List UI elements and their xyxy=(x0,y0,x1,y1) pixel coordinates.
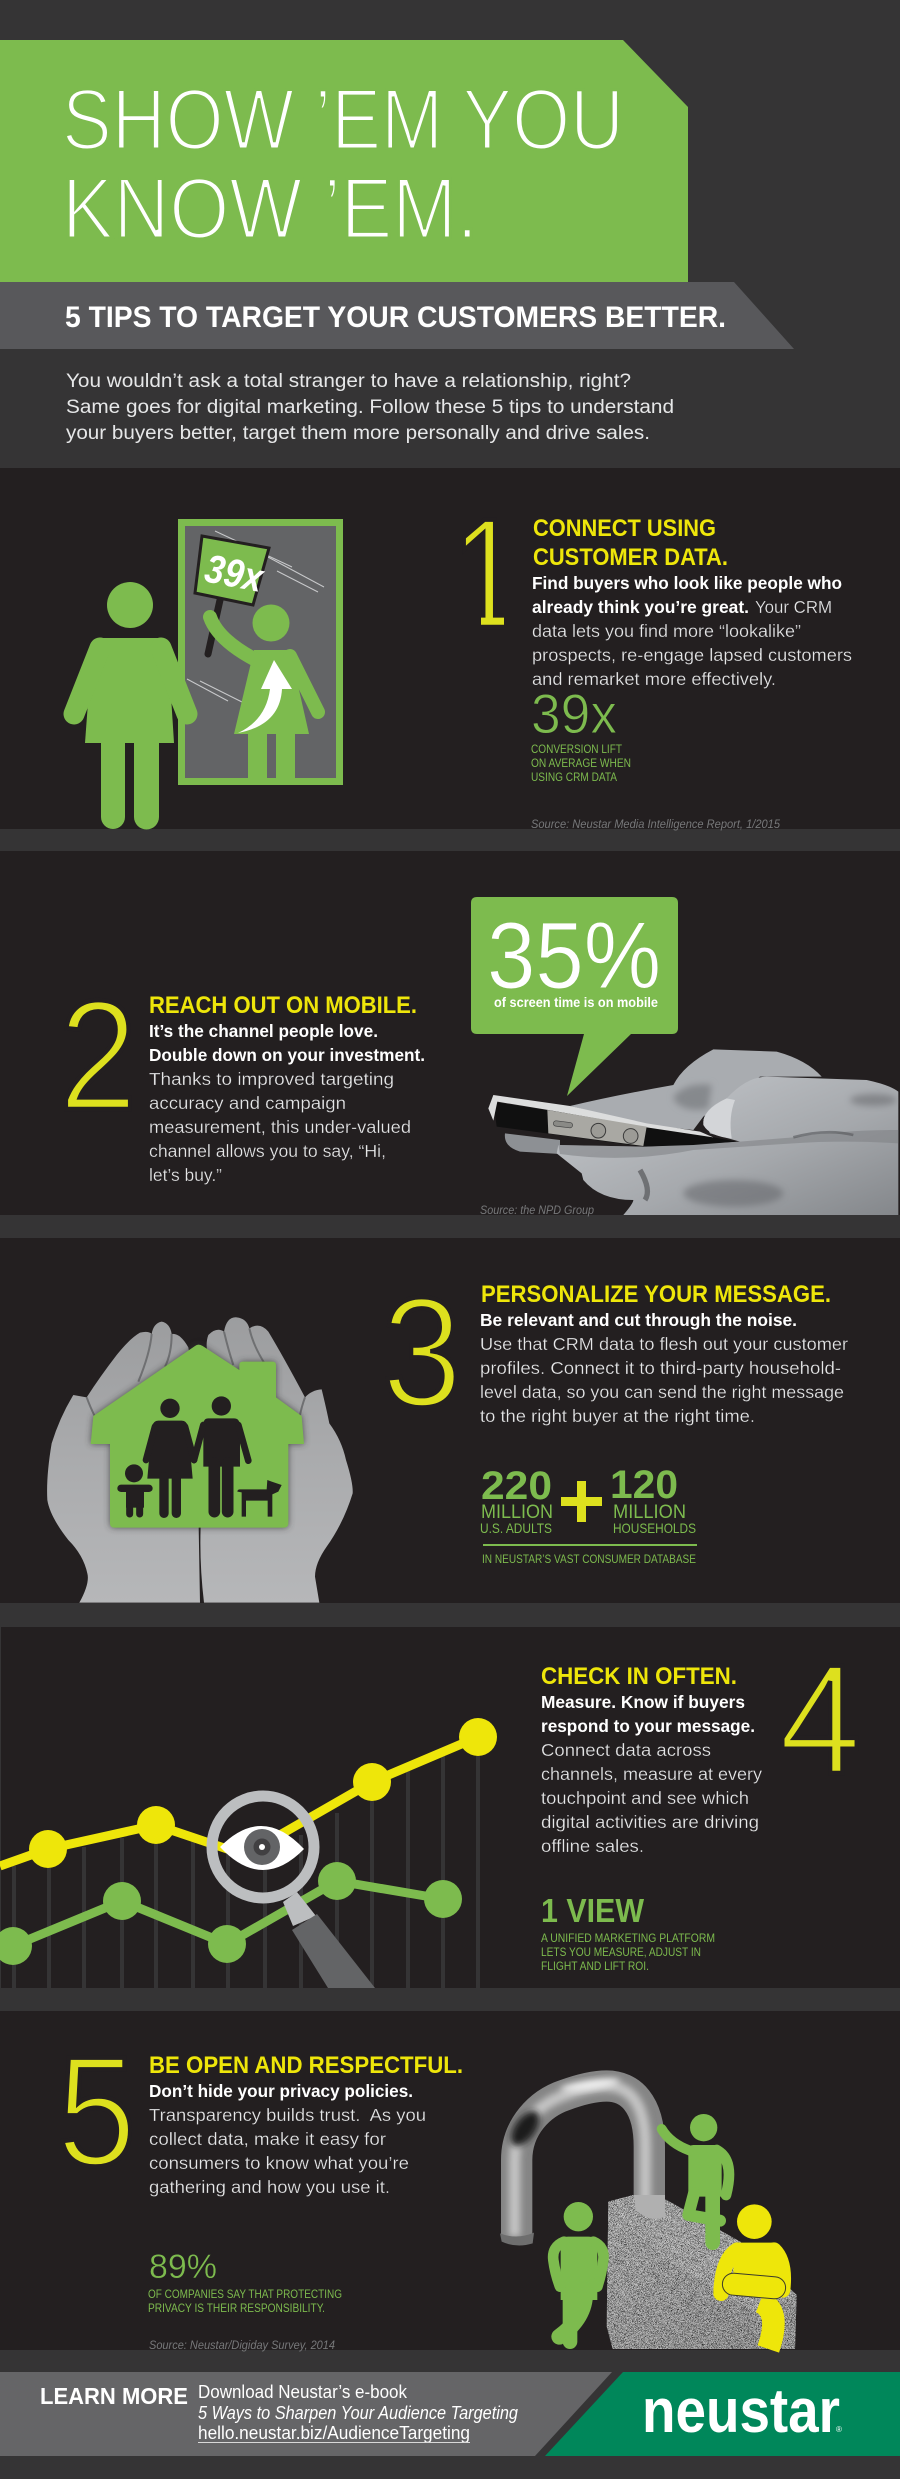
stat: 220 million + 120 million: MILLION xyxy=(613,1502,686,1523)
title: KNOW ’EM. xyxy=(62,161,478,257)
figure: yellow person sitting xyxy=(721,2204,787,2349)
body text: measurement, this under-valued xyxy=(149,1117,411,1137)
panel: tip 4 xyxy=(0,1627,900,1988)
body text xyxy=(541,1692,762,1856)
body text: touchpoint and see which xyxy=(541,1788,749,1808)
body text: Find buyers who look like people who xyxy=(532,573,842,593)
stat: 220 million + 120 million: IN NEUSTAR’S VAST CONSUMER DATABASE xyxy=(482,1552,696,1566)
stat: 39x: ON AVERAGE WHEN xyxy=(531,756,631,770)
body text: Double down on your investment. xyxy=(149,1045,425,1065)
body text: It’s the channel people love. xyxy=(149,1021,378,1041)
footer: neustar logo xyxy=(545,2372,900,2456)
body text: Connect data across xyxy=(541,1740,711,1760)
family xyxy=(121,1396,282,1517)
body text: accuracy and campaign xyxy=(149,1093,346,1113)
numeral 2: 2 xyxy=(59,969,137,1143)
body text: to the right buyer at the right time. xyxy=(480,1406,755,1426)
numeral 1: 1 xyxy=(452,487,522,661)
header: title banner xyxy=(0,40,688,282)
footer: learn more bar: 5 Ways to Sharpen Your Audience Targeting xyxy=(198,2403,518,2423)
body text: Thanks to improved targeting xyxy=(149,1069,394,1089)
panel: tip 2 xyxy=(0,851,900,1217)
title: SHOW ’EM YOU xyxy=(62,72,624,168)
chart: line chart with magnifier xyxy=(0,1627,497,1988)
heading xyxy=(533,515,728,571)
body text xyxy=(480,1310,848,1426)
footer: neustar logo: ® xyxy=(836,2425,842,2434)
stat: 1 view: LETS YOU MEASURE, ADJUST IN xyxy=(541,1945,701,1959)
intro text: You wouldn’t ask a total stranger to have a relationship, right? xyxy=(66,371,631,392)
callout: 35% speech bubble: of screen time is on mobile xyxy=(494,994,658,1010)
body text: Don’t hide your privacy policies. xyxy=(149,2081,413,2101)
subtitle ribbon xyxy=(0,282,794,349)
body text: data lets you find more “lookalike” xyxy=(532,621,801,641)
body text: and remarket more effectively. xyxy=(532,669,776,689)
body text: collect data, make it easy for xyxy=(149,2129,386,2149)
body text: digital activities are driving xyxy=(541,1812,759,1832)
stat: 39x xyxy=(531,682,631,784)
panel: tip 1 xyxy=(0,468,900,831)
callout: 35% speech bubble xyxy=(471,897,678,1096)
intro text xyxy=(66,371,674,444)
body text: gathering and how you use it. xyxy=(149,2177,390,2197)
body text: let’s buy.” xyxy=(149,1165,222,1185)
heading: BE OPEN AND RESPECTFUL. xyxy=(149,2052,463,2079)
stat: 220 million + 120 million: 120 xyxy=(610,1463,678,1507)
house shadow xyxy=(91,1345,304,1528)
numeral 3: 3 xyxy=(382,1266,462,1440)
stat: 220 million + 120 million: 220 xyxy=(481,1464,552,1508)
stat: 39x: 39x xyxy=(531,682,617,745)
intro text: Same goes for digital marketing. Follow these 5 tips to understand xyxy=(66,397,674,418)
source note: Source: Neustar Media Intelligence Report, 1/2015 xyxy=(531,819,781,831)
body text: level data, so you can send the right message xyxy=(480,1382,844,1402)
image: hands holding phone xyxy=(488,1049,898,1215)
figure: green man walking xyxy=(553,2202,604,2342)
figure: green man climbing xyxy=(662,2114,729,2243)
panel: tip 5 xyxy=(0,2011,900,2352)
panel: tip 3 xyxy=(0,1238,900,1603)
body text: Be relevant and cut through the noise. xyxy=(480,1310,797,1330)
house xyxy=(91,1345,304,1528)
footer: learn more bar: LEARN MORE xyxy=(40,2383,188,2409)
title xyxy=(62,72,624,257)
stat: 1 view: 1 VIEW xyxy=(541,1892,645,1929)
heading: REACH OUT ON MOBILE. xyxy=(149,992,417,1019)
callout: 35% speech bubble: 35% xyxy=(487,903,661,1009)
stat: 1 view xyxy=(541,1892,715,1973)
image: padlock with figures xyxy=(500,2077,800,2350)
stat: 1 view: A UNIFIED MARKETING PLATFORM xyxy=(541,1931,715,1945)
heading: CUSTOMER DATA. xyxy=(533,544,728,571)
stat: 220 million + 120 million: HOUSEHOLDS xyxy=(613,1520,696,1536)
body text xyxy=(149,1021,425,1185)
source note: Source: Neustar/Digiday Survey, 2014 xyxy=(149,2340,335,2352)
heading: CHECK IN OFTEN. xyxy=(541,1663,737,1690)
heading: PERSONALIZE YOUR MESSAGE. xyxy=(481,1281,831,1308)
body text: Your CRM xyxy=(755,597,832,617)
body text: channels, measure at every xyxy=(541,1764,762,1784)
heading: CONNECT USING xyxy=(533,515,716,542)
stat: 220 million + 120 million: U.S. ADULTS xyxy=(480,1520,552,1536)
numeral 5: 5 xyxy=(57,2025,136,2199)
body text: prospects, re-engage lapsed customers xyxy=(532,645,852,665)
icon: woman and mirror xyxy=(74,519,343,830)
icon: magnifier with eye xyxy=(212,1796,375,1988)
stat: 39x: CONVERSION LIFT xyxy=(531,742,623,756)
footer: learn more bar: Download Neustar’s e-book xyxy=(198,2382,408,2402)
body text: channel allows you to say, “Hi, xyxy=(149,1141,386,1161)
body text: already think you’re great. xyxy=(532,597,749,617)
image: hands holding house with family xyxy=(47,1317,353,1603)
footer: learn more bar xyxy=(0,2372,612,2456)
numeral 4: 4 xyxy=(779,1633,861,1807)
stat: 89% xyxy=(148,2248,342,2315)
intro text: your buyers better, target them more personally and drive sales. xyxy=(66,423,650,444)
stat: 39x: USING CRM DATA xyxy=(531,770,617,784)
body text: profiles. Connect it to third-party household- xyxy=(480,1358,841,1378)
body text: Transparency builds trust. As you xyxy=(149,2105,426,2125)
icon: woman and mirror: 39x xyxy=(201,547,268,601)
footer: neustar logo: neustar xyxy=(642,2377,840,2446)
body text xyxy=(149,2081,426,2197)
body text: Use that CRM data to flesh out your customer xyxy=(480,1334,848,1354)
stat: 220 million + 120 million: MILLION xyxy=(481,1502,553,1523)
source note: Source: the NPD Group xyxy=(480,1205,595,1217)
body text: consumers to know what you’re xyxy=(149,2153,409,2173)
body text: Measure. Know if buyers xyxy=(541,1692,745,1712)
body text xyxy=(532,573,852,689)
stat: 89%: 89% xyxy=(149,2248,217,2286)
stat: 220 million + 120 million xyxy=(480,1463,697,1566)
body text: offline sales. xyxy=(541,1836,644,1856)
stat: 89%: PRIVACY IS THEIR RESPONSIBILITY. xyxy=(148,2301,325,2315)
subtitle ribbon: 5 TIPS TO TARGET YOUR CUSTOMERS BETTER. xyxy=(65,301,726,334)
stat: 89%: OF COMPANIES SAY THAT PROTECTING xyxy=(148,2287,342,2301)
footer: learn more bar: hello.neustar.biz/AudienceTargeting xyxy=(198,2423,470,2443)
stat: 1 view: FLIGHT AND LIFT ROI. xyxy=(541,1959,649,1973)
body text: respond to your message. xyxy=(541,1716,755,1736)
